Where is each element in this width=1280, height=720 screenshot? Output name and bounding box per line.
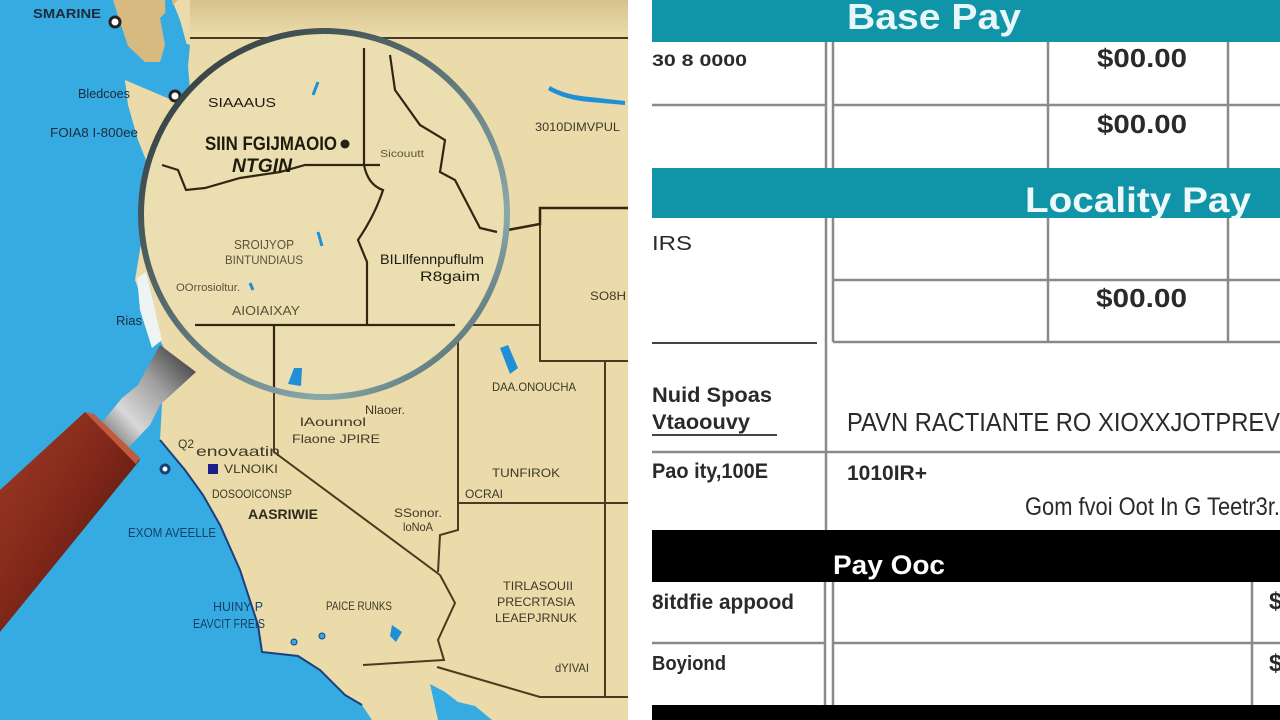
grip highlight — [85, 412, 140, 464]
panel: map of the western United States: PRECRTASIA — [497, 595, 575, 609]
table values: $00.00 — [1097, 43, 1187, 73]
land mass — [125, 0, 628, 720]
panel: map of the western United States: VLNOIKI — [224, 462, 278, 476]
header: Pay Ooc: Pay Ooc — [833, 550, 945, 580]
header: Pay Ooc — [652, 530, 1280, 582]
panel: map of the western United States: Nlaoer. — [365, 403, 405, 417]
map labels: HUINY P — [213, 599, 263, 614]
lens ring — [141, 31, 507, 397]
table values — [652, 43, 1280, 677]
map labels: EAVCIT FREIS — [193, 616, 265, 631]
panel: map of the western United States: DOSOOICONSP — [212, 487, 292, 501]
panel: map of the western United States: PAICE RUNKS — [326, 599, 392, 613]
lakes and rivers — [390, 86, 625, 642]
lens labels: SIIN FGIJMAOIO — [205, 134, 337, 155]
table values: Vtaoouvy — [652, 411, 750, 434]
lens labels — [176, 82, 484, 386]
panel: map of the western United States: TIRLASOUII — [503, 579, 573, 593]
map labels: EXOM AVEELLE — [128, 525, 216, 540]
map labels: FOIA8 I-800ee — [50, 125, 138, 140]
lens labels: AIOIAIXAY — [232, 303, 300, 318]
map labels — [33, 6, 265, 631]
header: Base Pay — [652, 0, 1280, 42]
table grid lines — [652, 42, 1280, 705]
metal collar — [100, 345, 196, 448]
state borders — [190, 38, 628, 697]
panel: map of the western United States: 3010DIMVPUL — [535, 120, 620, 134]
lens labels: Sicouutt — [380, 149, 424, 160]
northern tan band — [190, 0, 628, 36]
table values: 30 8 0000 — [652, 51, 747, 70]
panel: map of the western United States: SSonor. — [394, 506, 442, 520]
map labels: Rias — [116, 313, 142, 328]
panel: map of the western United States: lAounnol — [300, 415, 366, 429]
panel: map of the western United States: loNoA — [403, 520, 433, 534]
panel: map of the western United States: AASRIWIE — [248, 506, 318, 522]
lens labels: SROIJYOP — [234, 237, 294, 252]
table values: $00.00 — [1097, 109, 1187, 139]
table values: IRS — [652, 233, 692, 255]
table values: Pao ity,100E — [652, 460, 768, 483]
panel: map of the western United States: Q2 — [178, 437, 194, 451]
table values: 8itdfie appood — [652, 591, 794, 614]
lens labels: BINTUNDIAUS — [225, 253, 303, 267]
table values: 1010IR+ — [847, 462, 927, 485]
Puget Sound water — [165, 0, 190, 88]
panel: map of the western United States: SO8H — [590, 289, 626, 303]
lens labels: OOrrosioltur. — [176, 282, 240, 294]
coastline — [160, 440, 362, 705]
panel: map of the western United States: TUNFIROK — [492, 466, 560, 480]
lens labels: BILIlfennpuflulm — [380, 251, 484, 267]
lens labels: SIAAAUS — [208, 95, 276, 110]
panel: map of the western United States: dYIVAI — [555, 661, 589, 675]
panel: map of the western United States: enovaatin — [196, 443, 280, 459]
panel: map of the western United States: Flaone JPIRE — [292, 432, 380, 446]
table values: $00.00 — [1096, 283, 1187, 313]
table values: Nuid Spoas — [652, 384, 772, 407]
Vancouver Island — [113, 0, 178, 62]
map labels: SMARINE — [33, 6, 101, 21]
table values: Boyiond — [652, 653, 726, 675]
map labels: Bledcoes — [78, 86, 130, 101]
lens labels: NTGIN — [232, 156, 293, 177]
panel: map of the western United States: LEAEPJRNUK — [495, 611, 577, 625]
sea background — [0, 0, 628, 720]
panel: pay table — [652, 0, 1280, 720]
panel: map of the western United States: DAA.ONOUCHA — [492, 380, 576, 394]
bottom black bar — [652, 705, 1280, 720]
header: Locality Pay — [652, 168, 1280, 220]
Gulf of California — [430, 684, 492, 720]
city and square markers — [110, 17, 325, 645]
magnifying glass lens — [141, 31, 507, 397]
panel: map of the western United States: OCRAI — [465, 487, 503, 501]
panel: map of the western United States — [0, 0, 628, 720]
magnifying glass handle — [0, 345, 196, 632]
borders seen through the lens — [162, 48, 497, 392]
lens labels: R8gaim — [420, 268, 480, 284]
white surf strip — [137, 272, 162, 348]
wooden grip — [0, 412, 140, 632]
header: Locality Pay: Locality Pay — [1025, 181, 1252, 220]
